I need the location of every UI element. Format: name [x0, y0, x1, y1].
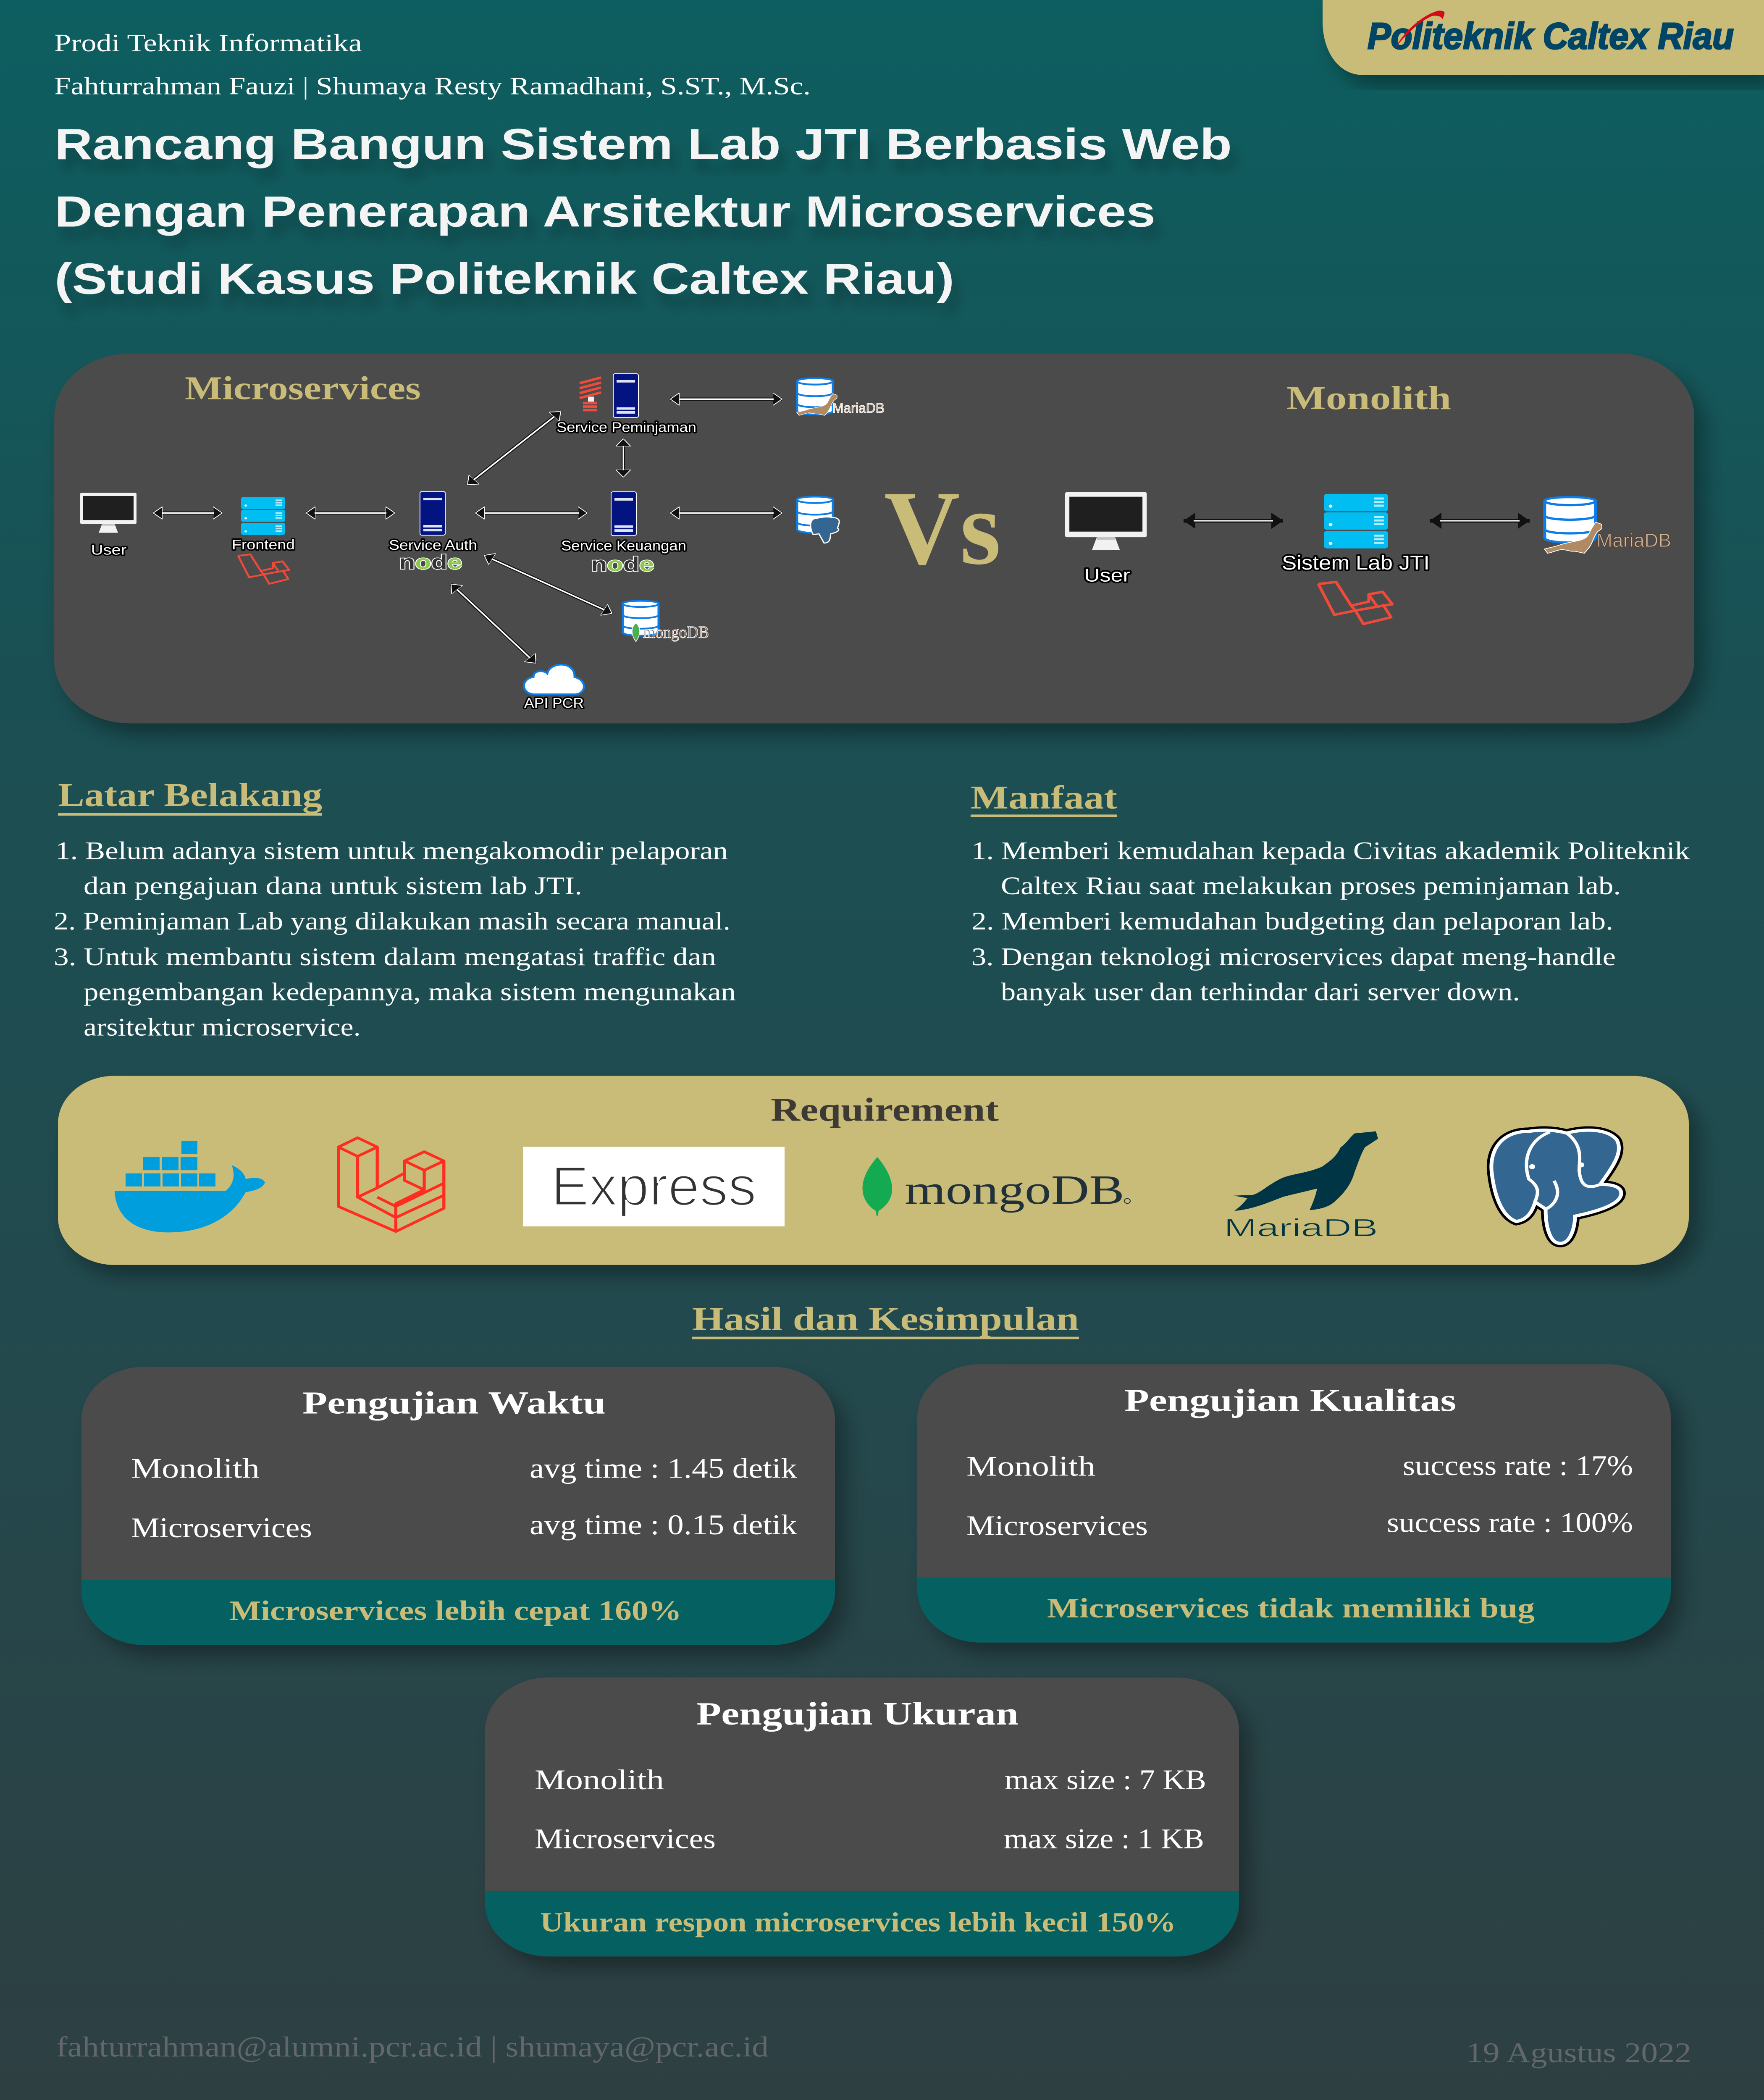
- card title: Pengujian Kualitas: [1124, 1383, 1456, 1418]
- title: (Studi Kasus Politeknik Caltex Riau): [55, 255, 954, 303]
- icon: mariadb database small: [797, 378, 885, 416]
- arrow: monolith user to system: [1184, 518, 1283, 523]
- icon: mariadb database small: MariaDB: [832, 401, 885, 416]
- microservices row: Microservices: [131, 1512, 312, 1544]
- title: [55, 120, 1232, 303]
- icon: monolith mariadb: [1544, 497, 1671, 553]
- card title: Pengujian Ukuran: [696, 1696, 1018, 1732]
- microservices row: max size : 1 KB: [1004, 1823, 1204, 1854]
- list: Caltex Riau saat melakukan proses peminjaman lab.: [1001, 872, 1621, 900]
- logo: mongodb: [863, 1157, 1130, 1216]
- icon: monolith user: [1065, 492, 1147, 586]
- icon: service auth: Service Auth: [389, 537, 477, 553]
- logo: express: Express: [551, 1155, 756, 1217]
- monolith row: Monolith: [535, 1764, 664, 1796]
- microservices row: [131, 1509, 797, 1544]
- arrow: keuangan to postgres: [670, 511, 782, 515]
- card: pengujian ukuran: [485, 1677, 1239, 1956]
- icon: monolith server: Sistem Lab JTI: [1282, 551, 1430, 574]
- icon: monolith user: User: [1084, 565, 1130, 586]
- footer: contact emails: fahturrahman@alumni.pcr.ac.id | shumaya@pcr.ac.id: [56, 2031, 769, 2063]
- logo: mariadb: MariaDB: [1224, 1214, 1378, 1242]
- card: pengujian waktu: [81, 1367, 835, 1645]
- monolith row: success rate : 17%: [1403, 1450, 1633, 1481]
- heading: Requirement: [771, 1091, 999, 1128]
- arrow: monolith system to database: [1430, 518, 1530, 523]
- logo: postgresql: [1491, 1130, 1621, 1243]
- icon: monolith server: [1282, 494, 1430, 574]
- list: 3. Untuk membantu sistem dalam mengatasi traffic dan: [54, 943, 716, 971]
- icon: mongodb database small: [623, 601, 709, 642]
- logo panel: [1323, 0, 1764, 75]
- list: 1. Memberi kemudahan kepada Civitas akademik Politeknik: [971, 837, 1690, 865]
- card footer: [917, 1578, 1671, 1643]
- section: manfaat: [971, 779, 1690, 1006]
- list: banyak user dan terhindar dari server down.: [1001, 978, 1520, 1006]
- list: 1. Belum adanya sistem untuk mengakomodir pelaporan: [55, 837, 728, 865]
- microservices row: success rate : 100%: [1387, 1507, 1633, 1538]
- card footer: [485, 1891, 1239, 1956]
- icon: service keuangan: Service Keuangan: [561, 538, 686, 554]
- arrow: peminjaman to keuangan: [622, 439, 625, 477]
- icon: mongodb database small: mongoDB: [643, 622, 709, 642]
- logo: mongodb: mongoDB: [905, 1168, 1124, 1213]
- icon: service peminjaman: Service Peminjaman: [556, 420, 696, 435]
- panel: architecture comparison: [54, 354, 1694, 723]
- card title: Pengujian Waktu: [302, 1385, 606, 1421]
- monolith row: Monolith: [966, 1450, 1095, 1482]
- microservices row: Microservices: [966, 1510, 1148, 1541]
- conclusion: Microservices tidak memiliki bug: [1047, 1593, 1535, 1624]
- list: arsitektur microservice.: [84, 1013, 361, 1041]
- list: pengembangan kedepannya, maka sistem mengunakan: [84, 978, 736, 1006]
- card: pengujian kualitas: [917, 1364, 1671, 1643]
- icon: api cloud: API PCR: [524, 695, 584, 711]
- icon: laravel small: [238, 554, 289, 584]
- title: Rancang Bangun Sistem Lab JTI Berbasis Web: [55, 120, 1232, 169]
- heading: hasil dan kesimpulan: Hasil dan Kesimpulan: [692, 1301, 1079, 1337]
- logo swoosh: [1395, 10, 1444, 48]
- icon: user monitor: [80, 493, 136, 558]
- icon: node auth: node: [399, 551, 462, 573]
- list: 2. Peminjaman Lab yang dilakukan masih secara manual.: [54, 907, 730, 935]
- list: [971, 837, 1690, 1006]
- conclusion: Microservices lebih cepat 160%: [229, 1595, 682, 1626]
- arrow: auth to mongodb: [484, 555, 612, 613]
- footer: date: 19 Agustus 2022: [1466, 2037, 1691, 2068]
- conclusion: Ukuran respon microservices lebih kecil 150%: [540, 1907, 1176, 1937]
- logo: express: [523, 1147, 785, 1226]
- authors: Fahturrahman Fauzi | Shumaya Resty Ramadhani, S.ST., M.Sc.: [54, 72, 811, 100]
- icon: frontend server: Frontend: [232, 537, 295, 552]
- icon: service peminjaman: [556, 374, 696, 435]
- icon: postgres database small: [797, 496, 839, 543]
- icon: node keuangan: node: [591, 553, 654, 575]
- list: [54, 837, 736, 1041]
- monolith row: [131, 1452, 797, 1484]
- microservices row: [966, 1507, 1633, 1541]
- title: Dengan Penerapan Arsitektur Microservices: [55, 187, 1155, 236]
- list: dan pengajuan dana untuk sistem lab JTI.: [84, 872, 582, 900]
- section: latar belakang: [54, 776, 736, 1041]
- icon: api cloud: [524, 664, 584, 711]
- monolith row: max size : 7 KB: [1005, 1764, 1206, 1796]
- arrow: user to frontend: [153, 511, 222, 515]
- arrow: auth to keuangan: [475, 511, 587, 515]
- monolith row: avg time : 1.45 detik: [530, 1452, 797, 1484]
- heading: Latar Belakang: [58, 776, 322, 813]
- microservices row: Microservices: [535, 1823, 716, 1854]
- department: Prodi Teknik Informatika: [54, 29, 362, 57]
- monolith row: Monolith: [131, 1452, 260, 1484]
- icon: laravel monolith: [1318, 582, 1392, 624]
- monolith row: [966, 1450, 1633, 1482]
- icon: service keuangan: [561, 492, 686, 554]
- icon: monolith mariadb: MariaDB: [1596, 530, 1671, 551]
- list: 3. Dengan teknologi microservices dapat meng-handle: [971, 943, 1616, 971]
- microservices row: [535, 1823, 1204, 1854]
- panel: requirement: [58, 1076, 1689, 1265]
- arrow: peminjaman to mariadb: [670, 397, 782, 401]
- logo: mariadb: [1224, 1131, 1378, 1242]
- heading: microservices: Microservices: [185, 370, 421, 407]
- microservices row: avg time : 0.15 detik: [530, 1509, 797, 1541]
- arrow: auth to peminjaman: [467, 412, 561, 485]
- heading: Manfaat: [971, 779, 1117, 816]
- icon: zipkin bulb: [580, 378, 601, 410]
- monolith row: [535, 1764, 1206, 1796]
- card footer: [81, 1580, 835, 1645]
- icon: service auth: [389, 491, 477, 553]
- header text block: [54, 29, 811, 100]
- icon: docker: [115, 1141, 265, 1232]
- arrow: auth to api: [451, 584, 536, 663]
- versus label: Vs: [884, 469, 1001, 586]
- heading: monolith: Monolith: [1286, 380, 1451, 416]
- arrow: frontend to auth: [306, 511, 395, 515]
- icon: laravel: [339, 1138, 444, 1231]
- list: 2. Memberi kemudahan budgeting dan pelaporan lab.: [971, 907, 1613, 935]
- icon: frontend server: [232, 497, 295, 552]
- icon: user monitor: User: [91, 542, 126, 558]
